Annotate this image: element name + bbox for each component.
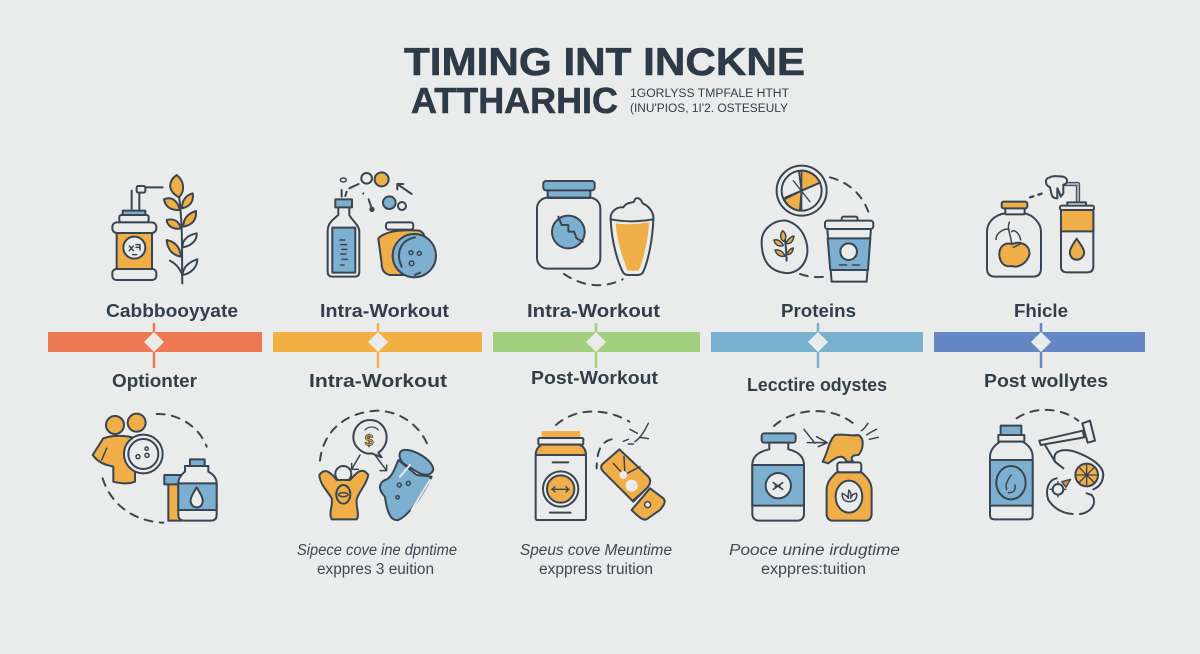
description text column 4 — [729, 542, 900, 578]
labels below timeline: Lecctire odystes — [747, 374, 887, 395]
labels above timeline: Intra-Workout — [527, 300, 660, 321]
icon: coin bubble, torso and shaker — [319, 411, 433, 520]
description text column 2: Sipece cove ine dpntime — [297, 542, 457, 559]
bar: fluids timeline segment — [934, 323, 1145, 368]
icon: capsule bottle and spray bottle — [752, 411, 878, 521]
icon: athletes and hydration bottle — [93, 414, 217, 523]
description text column 3 — [520, 542, 672, 578]
bar: post-workout timeline segment — [493, 323, 700, 368]
labels above timeline: Cabbbooyyate — [106, 300, 238, 321]
bar: intra-workout timeline segment — [273, 323, 482, 368]
labels below timeline: Post-Workout — [531, 367, 658, 388]
labels above timeline — [106, 300, 1068, 321]
title — [404, 41, 805, 121]
icon: jar and beer glass — [537, 181, 653, 285]
labels below timeline: Optionter — [112, 370, 197, 391]
description text column 2: exppres 3 euition — [317, 561, 434, 578]
title: TIMING INT INCKNE — [404, 41, 805, 84]
labels above timeline: Intra-Workout — [320, 300, 449, 321]
labels below timeline: Intra-Workout — [309, 370, 447, 391]
icon: coin bubble, torso and shaker: $ — [365, 432, 374, 449]
icon: supplement bottle and wheat — [112, 175, 197, 283]
icon: protein canister and bar — [536, 411, 665, 520]
bar: carbohydrate timeline segment — [48, 323, 262, 368]
description text column 2 — [297, 542, 457, 578]
labels above timeline: Proteins — [781, 300, 856, 321]
bar: proteins timeline segment — [711, 323, 923, 368]
subtitle text: 1GORLYSS TMPFALE HTHT — [630, 88, 789, 100]
icon: water bottle, jar and bubbles — [328, 172, 436, 277]
title: ATTHARHIC — [411, 80, 618, 121]
icon: apple jar and pump bottle — [987, 176, 1094, 277]
subtitle text — [630, 88, 789, 115]
labels above timeline: Fhicle — [1014, 300, 1068, 321]
labels below timeline — [112, 367, 1108, 395]
description text column 3: Speus cove Meuntime — [520, 542, 672, 559]
icon: citrus slice, grain and cup — [762, 166, 873, 282]
subtitle text: (INU'PIOS, 1I'2. OSTESEULY — [630, 103, 788, 115]
icon: bottle, shaker tool and citrus — [990, 410, 1103, 519]
labels below timeline: Post wollytes — [984, 370, 1108, 391]
description text column 3: exppress truition — [539, 561, 653, 578]
description text column 4: Pooce unine irdugtime — [729, 542, 900, 559]
description text column 4: exppres:tuition — [761, 561, 866, 578]
